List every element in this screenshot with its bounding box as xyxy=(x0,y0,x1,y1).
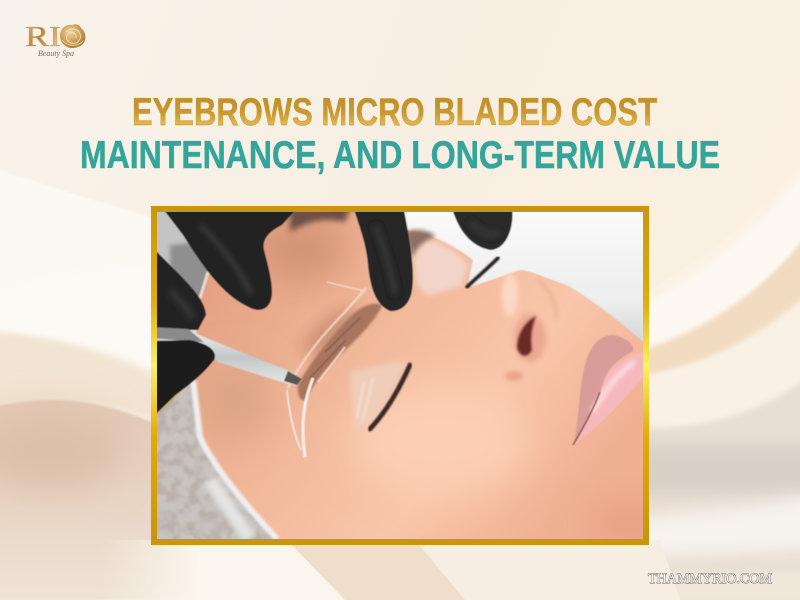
icon: gold rose xyxy=(60,24,85,48)
icon: microblading pen xyxy=(150,327,302,385)
glove: top left finger xyxy=(164,212,294,311)
far eye socket and brow xyxy=(406,230,498,296)
hair net upper edge xyxy=(200,272,208,298)
eyebrow with white guide lines xyxy=(287,282,382,457)
title line 1: EYEBROWS MICRO BLADED COST xyxy=(132,91,657,134)
logo tagline: Beauty Spa xyxy=(38,49,74,58)
closed eye lid and lashes xyxy=(350,362,410,432)
left silk folds xyxy=(0,158,200,600)
nose xyxy=(502,273,556,381)
glove: left finger xyxy=(157,251,206,331)
right silk folds xyxy=(600,130,800,600)
logo letters: RI xyxy=(25,21,61,53)
bottom silk folds xyxy=(100,540,680,600)
glove: top right fingertip xyxy=(452,212,514,250)
glove: thumb xyxy=(157,340,216,414)
photo backdrop xyxy=(157,212,643,343)
hair net lower xyxy=(157,378,280,539)
gold frame xyxy=(151,206,649,545)
logo: RIO Beauty Spa xyxy=(25,21,85,58)
hair net upper xyxy=(168,242,208,297)
face skin xyxy=(195,205,670,550)
website url: THAMMYRIO.COM xyxy=(648,571,772,587)
framed photo: microblading treatment xyxy=(150,205,670,550)
lips xyxy=(573,335,650,445)
glove: top centre finger xyxy=(353,205,413,311)
photo content xyxy=(157,212,643,539)
glove highlights xyxy=(170,225,396,318)
title xyxy=(80,91,720,177)
